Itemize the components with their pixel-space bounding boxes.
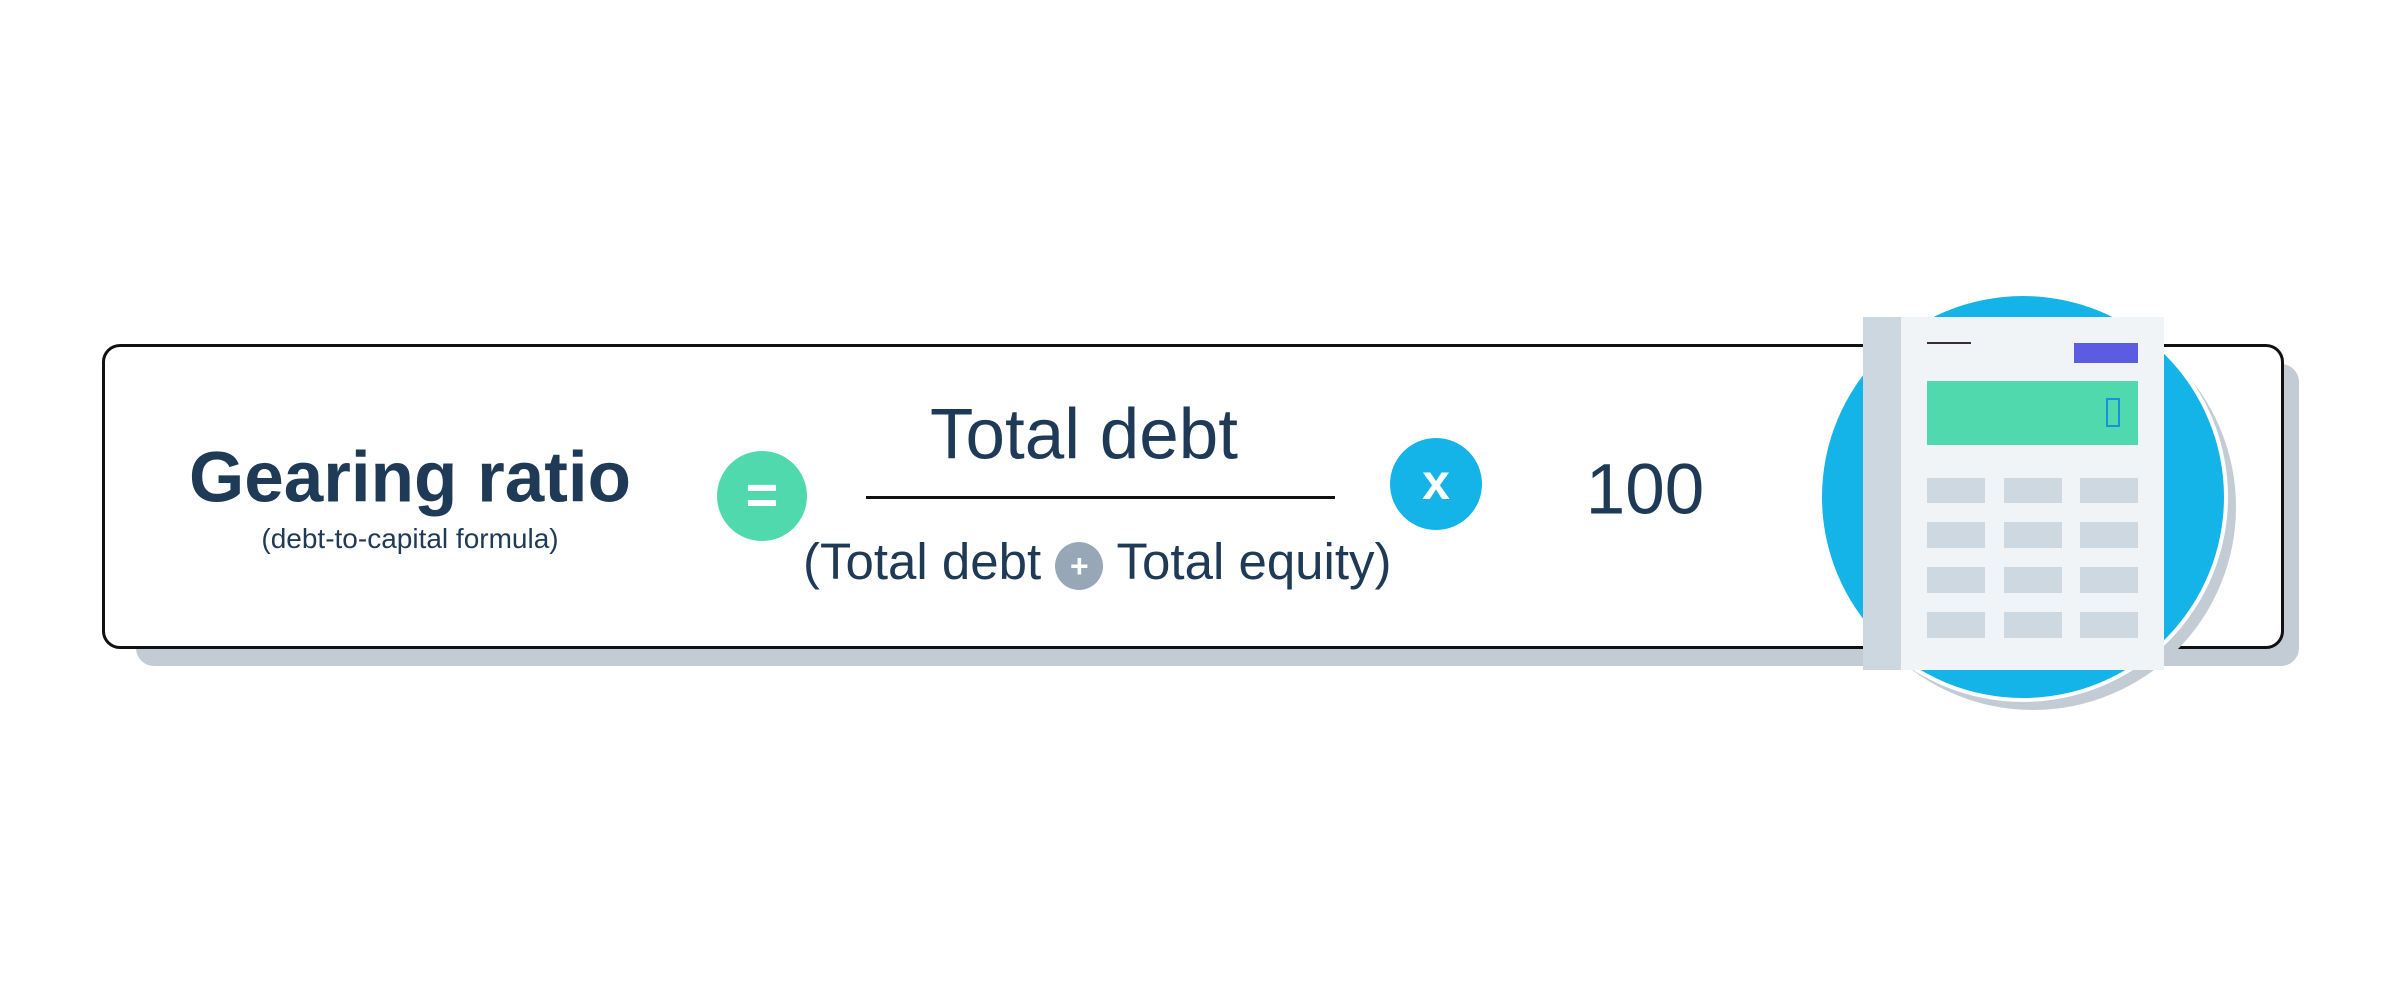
formula panel [102, 344, 2284, 649]
title: Gearing ratio [189, 438, 631, 518]
icon: equals [717, 451, 807, 541]
panel shadow [136, 364, 2299, 666]
denominator: (Total debt Total equity) [803, 533, 1392, 590]
fraction line [866, 496, 1335, 499]
icon: calculator [1822, 296, 2236, 710]
icon: multiply [1390, 438, 1482, 530]
icon: equals: = [746, 463, 778, 526]
denominator: + [1070, 548, 1089, 584]
number 100: 100 [1586, 450, 1704, 530]
icon: multiply: x [1422, 454, 1450, 510]
numerator: Total debt [930, 396, 1238, 474]
subtitle: (debt-to-capital formula) [261, 523, 559, 554]
